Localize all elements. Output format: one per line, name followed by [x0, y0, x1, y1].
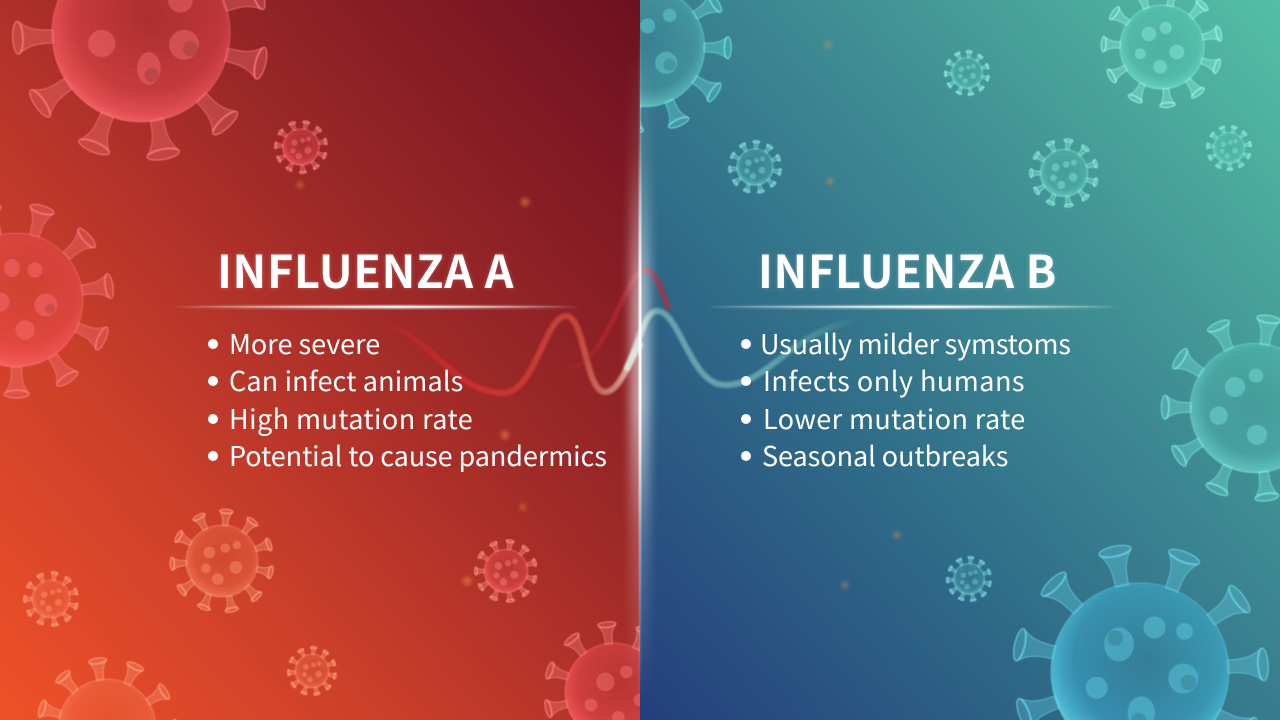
icon: small orange virus centre	[470, 536, 542, 606]
wave line: red, crossing the divider	[565, 270, 668, 368]
icon: red virus left edge	[0, 179, 138, 421]
panel: influenza A background	[0, 0, 640, 720]
icon: virus bottom left edge	[27, 648, 187, 720]
icon: teal virus top left of panel	[530, 0, 760, 162]
virus group: influenza B side	[640, 0, 1280, 720]
icon: small teal virus left	[727, 139, 783, 195]
text block: influenza B bullets	[741, 323, 1071, 474]
icon: small teal virus top	[942, 48, 992, 98]
heading: influenza B: INFLUENZA B	[758, 236, 1057, 301]
icon: small orange virus bottom	[286, 645, 338, 697]
text block: influenza B bullets: Seasonal outbreaks	[762, 435, 1008, 474]
text block: influenza A bullets: High mutation rate	[229, 398, 473, 437]
text block: influenza A bullets: Can infect animals	[229, 360, 463, 399]
text block: influenza A bullets	[208, 323, 607, 474]
icon: large blue virus bottom right	[973, 506, 1280, 720]
icon: orange virus	[165, 505, 279, 617]
icon: large red virus top left	[0, 0, 283, 174]
virus group: influenza A side	[0, 0, 640, 720]
icon: small blue virus bottom	[944, 555, 994, 603]
text block: influenza B bullets: Usually milder symstoms	[760, 323, 1071, 362]
icon: small teal virus right	[1202, 121, 1256, 175]
text block: influenza A bullets: Potential to cause pandermics	[229, 435, 607, 474]
central divider glow	[630, 20, 650, 700]
divider: under influenza A title	[170, 306, 580, 308]
icon: teal virus right edge	[1131, 284, 1280, 531]
icon: virus bottom right of red panel	[536, 614, 692, 720]
icon: small red virus	[269, 116, 333, 178]
icon: small teal virus centre	[1025, 134, 1103, 212]
text block: influenza A bullets: More severe	[229, 323, 380, 362]
glowing particles	[297, 42, 900, 588]
heading: influenza A: INFLUENZA A	[217, 236, 514, 301]
icon: teal virus top right	[1090, 0, 1234, 118]
text block: influenza B bullets: Lower mutation rate	[763, 398, 1026, 437]
icon: small orange virus left	[20, 568, 82, 630]
wave line: teal, right panel	[627, 311, 860, 385]
wave line: red, left panel	[380, 316, 640, 393]
divider: under influenza B title	[705, 306, 1120, 308]
text block: influenza B bullets: Infects only humans	[763, 360, 1025, 399]
panel: influenza B background	[640, 0, 1280, 720]
